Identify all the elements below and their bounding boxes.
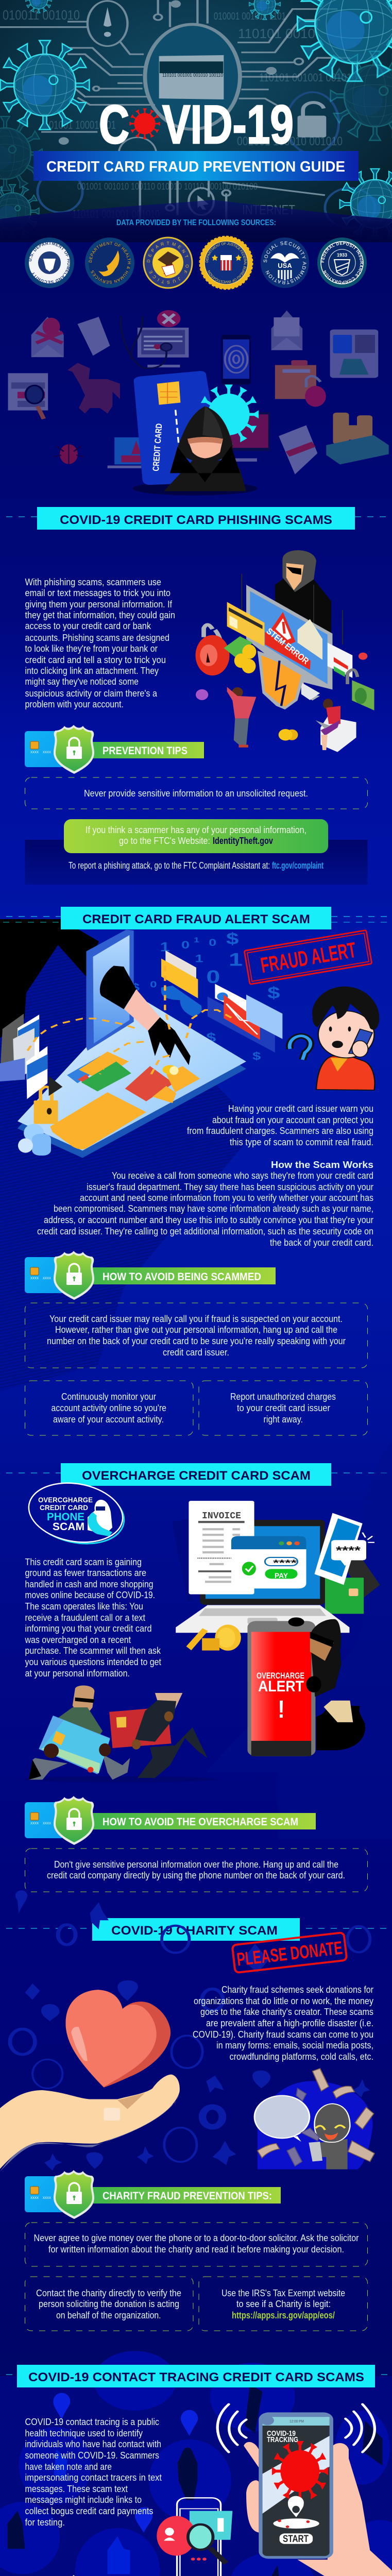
text block: fraud alert description: from fraudulent charges. Scammers are also using (187, 1126, 373, 1136)
text block: overcharge description: informing you that your credit card (25, 1623, 151, 1634)
heading: overcharge: OVERCHARGE CREDIT CARD SCAM (82, 1469, 311, 1483)
open hand (0, 2074, 180, 2169)
icon: cyan virus (199, 385, 259, 444)
circuit board illustration (0, 0, 375, 228)
text block: overcharge description: at your personal information. (25, 1668, 130, 1679)
phone screen labels: TRACKING (267, 2435, 298, 2444)
heading: phishing scams (6, 507, 387, 530)
icon: hooded caller (88, 1500, 112, 1534)
tip banner: charity prevention: XXXX (30, 2197, 39, 2200)
icon: green padlock (348, 670, 374, 710)
binary and money symbols: 0 (181, 939, 190, 951)
logo: overcharge phone scam badge: CREDIT CARD (40, 1503, 88, 1512)
laptop (176, 1520, 349, 1633)
laptop labels: **** (273, 1558, 297, 1568)
illustration: tracking phone in hand (157, 2404, 392, 2576)
icon: blue mask (161, 986, 202, 1016)
phone body (259, 2412, 333, 2559)
tip box: report charges: to your credit card issuer (237, 1403, 330, 1413)
text block: overcharge description: This credit card scam is gaining (25, 1557, 142, 1567)
alert phone (247, 1621, 315, 1756)
illustration: fraud alert scene (0, 919, 379, 1158)
dotted data trail (27, 966, 234, 1074)
text block: charity description: are prevalent after a high-profile disaster (i.e. (206, 2018, 373, 2028)
text block: overcharge description: was overcharged on a recent (25, 1635, 131, 1645)
icon: coin stacks (333, 413, 372, 444)
text block: charity description: COVID-19). Charity fraud scams can come to you (193, 2029, 373, 2040)
tip box: verify charity: person soliciting the donation is acting (39, 2299, 179, 2309)
tip box: door-to-door solicitors: Never agree to give money over the phone or to a door-to-door solicitor. Ask the solicitor (34, 2233, 359, 2243)
tip box: IRS tax exempt: https://apps.irs.gov/app/eos/ (232, 2310, 335, 2320)
tip box: door-to-door solicitors (25, 2223, 368, 2266)
text block: contact tracing description: someone with COVID-19. Scammers (25, 2450, 159, 2461)
silhouette people (8, 2384, 383, 2576)
phone screen labels (267, 2420, 309, 2545)
icon: login window (8, 373, 48, 419)
banknotes (258, 2069, 374, 2162)
icon: document (77, 317, 110, 355)
text block: contact tracing description: COVID-19 contact tracing is a public (25, 2417, 159, 2427)
icon: padlock (34, 1087, 58, 1124)
heading: fraud alert (3, 907, 392, 929)
binary text decoration (3, 7, 357, 221)
phishing icons collage (8, 310, 389, 474)
tip box: IRS tax exempt: Use the IRS's Tax Exempt website (221, 2288, 345, 2298)
phone and bubble (315, 1513, 374, 1585)
text block: phishing description: access to your credit card or bank (25, 621, 151, 631)
binary text decoration: 110101 001001 001010 (259, 71, 357, 84)
icon: scattered cards (50, 1052, 200, 1149)
tip banner: avoid overcharge: XXXX (30, 1822, 39, 1825)
logo: overcharge phone scam badge: PHONE (47, 1511, 84, 1523)
start button (280, 2533, 313, 2544)
heading: charity scam (6, 1918, 387, 1941)
text block: fraud alert description (37, 1104, 373, 1248)
heading: contact tracing: COVID-19 CONTACT TRACING CREDIT CARD SCAMS (28, 2370, 364, 2384)
hooded hacker (164, 406, 246, 491)
icon: folder and lock (275, 360, 326, 407)
icon: red envelope (215, 984, 260, 1040)
background: contact tracing crowd (0, 2351, 392, 2576)
seal: Department of Justice: DEPARTMENT OF JUSTICE (147, 242, 189, 284)
icon: cash bundle (326, 435, 389, 465)
tip box: IRS tax exempt (199, 2277, 368, 2331)
phone screen labels: COVID-19 (267, 2429, 296, 2438)
text block: phishing description: giving them your personal information. If (25, 599, 173, 609)
seal: FDIC: 1933 (337, 252, 347, 258)
tip banner: avoid overcharge (25, 1796, 316, 1845)
callout: identity theft: If you think a scammer has any of your personal information, (86, 825, 306, 835)
distressed man (227, 687, 256, 748)
tip box: unsolicited requests (25, 777, 368, 809)
icon: padlock red (196, 625, 230, 675)
fingers (244, 2442, 259, 2533)
illustration: burglars carrying cards (23, 1685, 217, 1782)
login window (328, 642, 352, 678)
icon: fingerprint phone (221, 335, 251, 384)
icon: laptop warning (108, 437, 142, 468)
green and black cards (325, 1556, 380, 1614)
speech bubble (254, 2095, 310, 2142)
tip box: monitor activity (25, 1381, 193, 1435)
text block: phishing description: accounts. Phishing scams are designed (25, 633, 169, 643)
subheading: how the scam works: How the Scam Works (271, 1160, 373, 1170)
hand shadow (0, 2094, 179, 2172)
illustration: laptop payment scene (173, 1501, 380, 1756)
panel: hero header (0, 0, 392, 242)
distressed woman on box (315, 699, 356, 752)
tip banner: avoid being scammed: HOW TO AVOID BEING SCAMMED (103, 1271, 261, 1283)
icon: trojan horse (67, 363, 120, 414)
icon: coronavirus particles (0, 0, 392, 239)
text block: overcharge description: you various questions intended to get (25, 1657, 161, 1667)
text block: contact tracing description: collect bogus credit card payments (25, 2506, 154, 2516)
tip box: issuer may call: However, rather than give out your personal information, hang up and call the (55, 1325, 337, 1335)
grinning figure (309, 2104, 350, 2170)
hero illustration: hacker and credit card (132, 371, 259, 495)
laptop labels: PAY (275, 1571, 288, 1580)
icon: question mark (289, 1036, 311, 1060)
seal: Social Security Administration: SOCIAL SECURITY ADMINISTRATION (264, 241, 306, 284)
icon: yellow folder (161, 951, 198, 998)
hacker silhouette (0, 919, 99, 1038)
text block: phishing description: problem with your account. (25, 699, 124, 709)
text block: charity description: Charity fraud schemes seek donations for (221, 1985, 373, 1995)
text block: phishing description: to look like they're from your bank or (25, 643, 158, 654)
text block: fraud alert description: this type of scam to commit real fraud. (230, 1137, 373, 1147)
binary and money symbols: $ (131, 981, 140, 994)
blue card (39, 1716, 110, 1774)
background hatch: fraud section (0, 922, 258, 1391)
small phone and analytics (157, 2498, 232, 2576)
phone platform (18, 995, 246, 1158)
card label: CREDIT CARD (151, 423, 164, 471)
tip box: verify charity (25, 2277, 193, 2331)
text block: overcharge description: handled in cash and more shopping (25, 1579, 154, 1589)
credit card (134, 371, 224, 485)
agency seals (25, 236, 367, 290)
binary text decoration: 001001 100010 001010 (237, 134, 343, 148)
icon: gold coin and bar (186, 1624, 241, 1651)
binary and money symbols: 1 (160, 940, 169, 954)
signal waves (217, 2404, 374, 2452)
logo: overcharge phone scam badge (24, 1476, 130, 1552)
binary text decoration: 010011 001010 (3, 7, 80, 23)
tip banner: prevention tips: PREVENTION TIPS (103, 745, 188, 757)
text block: phishing description: email or text messages to trick you into (25, 588, 171, 598)
illustration: scammer with money (254, 2069, 374, 2170)
invoice (189, 1501, 254, 1594)
text block: phishing description: into clicking link an attachment. They (25, 666, 159, 676)
icon: private document (279, 425, 317, 474)
text block: fraud alert description: Having your credit card issuer warn you (228, 1104, 373, 1114)
stamp: please donate (232, 1933, 347, 1973)
tip box: overcharge advice: Don't give sensitive personal information over the phone. Hang up and call the (54, 1859, 338, 1870)
text block: contact tracing description (25, 2417, 162, 2528)
text block: overcharge description: receive a fraudulent call or a text (25, 1613, 145, 1623)
ID card (227, 602, 264, 646)
alert phone label: OVERCHARGE (257, 1671, 304, 1681)
text block: charity description: organizations that do little or no work, the money (194, 1996, 373, 2006)
logo: overcharge phone scam badge: OVERCGHARGE (38, 1496, 93, 1504)
heading: fraud alert: CREDIT CARD FRAUD ALERT SCAM (82, 912, 310, 926)
binary and money symbols: 1 (194, 936, 199, 944)
tip box: monitor activity: aware of your account activity. (53, 1414, 164, 1425)
icon: rejected X (157, 310, 180, 327)
icon: wifi card (246, 995, 282, 1039)
text block: phishing description: they get that information, they could gain (25, 610, 175, 620)
seal: FBI (199, 236, 253, 290)
icon: black sack (316, 1701, 365, 1750)
stamp: please donate: PLEASE DONATE (236, 1937, 344, 1970)
burglar right (138, 1693, 208, 1778)
icon: location pins (53, 2393, 198, 2533)
binary text decoration: 010001 001011 1101 (214, 11, 286, 22)
tip banner: avoid being scammed: XXXX (43, 1277, 51, 1280)
tip banner: avoid being scammed (25, 1251, 276, 1300)
data sources label: DATA PROVIDED BY THE FOLLOWING SOURCES: (116, 218, 276, 227)
laptop labels: INVOICE (202, 1511, 241, 1521)
tip banner: avoid overcharge: XXXX (43, 1822, 51, 1825)
text block: fraud alert description: about fraud on your account can protect you (212, 1115, 373, 1125)
tip banner: prevention tips: XXXX (43, 751, 51, 754)
text block: contact tracing description: impersonating contact tracers in text (25, 2472, 162, 2483)
background hatch: overcharge section (206, 1443, 392, 1839)
text block: contact tracing description: individuals who have had contact with (25, 2439, 161, 2449)
text block: charity description: crowdfunding platforms, cold calls, etc. (230, 2052, 373, 2062)
illustration: heart over open hand (0, 1990, 180, 2172)
tip box: monitor activity: account activity online so you're (52, 1403, 166, 1413)
binary text decoration: 01001 100010 01 (49, 118, 116, 131)
binary and money symbols: 0 (150, 980, 157, 990)
text block: charity description: goes to the fake charity's creator. These scams (200, 2007, 373, 2017)
icon: gold coins (279, 729, 298, 740)
background shapes: charity decoration (10, 1890, 370, 2171)
binary and money symbols (131, 930, 280, 1062)
tip box: issuer may call: number on the back of your credit card to be sure you're really speaking with your (47, 1336, 346, 1346)
tip box: report charges: Report unauthorized charges (230, 1392, 336, 1402)
text block: contact tracing description: messages might include links to (25, 2495, 142, 2505)
tip box: issuer may call: Your credit card issuer may really call you if fraud is suspected on your account. (49, 1314, 343, 1324)
text block: overcharge description: The scam operates like this: You (25, 1601, 143, 1612)
seal: Homeland Security: U.S. DEPARTMENT OF HOMELAND SECURITY (28, 242, 71, 284)
stamp: fraud alert (244, 930, 372, 985)
text block: overcharge description (25, 1557, 161, 1679)
tip banner: avoid overcharge: HOW TO AVOID THE OVERCHARGE SCAM (103, 1816, 298, 1828)
icon: coins and cash (224, 636, 256, 673)
subtitle banner (33, 151, 359, 181)
binary and money symbols: $ (267, 984, 280, 1002)
binary text decoration: 110101 001001 001010 (72, 208, 160, 221)
text block: phishing description (25, 577, 175, 709)
logo: overcharge phone scam badge: SCAM (53, 1521, 84, 1533)
binary text decoration: 001001 001010 100110 010010 10110 100100 010100 (77, 181, 258, 192)
text block: overcharge description: purchase. The scammer will then ask (25, 1646, 161, 1656)
alert phone label: ! (278, 1696, 285, 1723)
icon: open envelope (271, 311, 302, 350)
icon: coin stack (18, 1124, 51, 1156)
text block: charity description (193, 1985, 373, 2062)
text block: overcharge description: moves online because of COVID-19. (25, 1590, 155, 1600)
panel: report attack (25, 840, 368, 885)
laptop labels (202, 1511, 361, 1580)
text block: overcharge description: ground as fewer transactions are (25, 1568, 146, 1578)
heading: phishing scams: COVID-19 CREDIT CARD PHISHING SCAMS (60, 513, 332, 527)
seal: Social Security Administration: USA (278, 262, 292, 269)
icon: bug with code (54, 444, 84, 464)
tip banner: contact tracing prevention (25, 2575, 200, 2576)
text block: fraud alert description: the back of your credit card. (270, 1238, 373, 1248)
phone screen labels: START (283, 2534, 309, 2545)
tip box: monitor activity: Continuously monitor your (61, 1392, 156, 1402)
tip banner: avoid being scammed: XXXX (30, 1277, 39, 1280)
callout: identity theft: IdentityTheft.gov (213, 836, 273, 846)
tip banner: charity prevention: CHARITY FRAUD PREVENTION TIPS: (103, 2190, 272, 2202)
tip box: issuer may call: credit card issuer. (163, 1347, 229, 1358)
monitor (246, 585, 332, 701)
alert phone label: ALERT (258, 1678, 304, 1695)
binary and money symbols: 0 (209, 937, 216, 948)
icon: broken shield (258, 651, 305, 709)
subtitle banner: CREDIT CARD FRAUD PREVENTION GUIDE (46, 159, 345, 175)
alert phone label (257, 1671, 304, 1723)
purple banknotes (287, 2088, 319, 2166)
social profile screens (0, 1013, 62, 1099)
tip box: overcharge advice (25, 1849, 368, 1892)
tip banner: charity prevention: XXXX (43, 2197, 51, 2200)
callout: identity theft: go to the FTC's Website: (119, 836, 210, 846)
arm (298, 2443, 392, 2576)
red card (109, 1700, 176, 1750)
icon: bugs (196, 653, 367, 700)
phone screen labels: 12:00 PM (289, 2420, 304, 2424)
tip box: overcharge advice: credit card company directly by using the phone number on the back of your card. (47, 1870, 345, 1880)
tip box: unsolicited requests: Never provide sensitive information to an unsolicited request. (84, 788, 308, 799)
binary and money symbols: $ (226, 930, 238, 948)
burglar peeking (288, 1617, 341, 1697)
phone with reaching hand (86, 929, 191, 1065)
navy wave (0, 200, 392, 242)
heading: charity scam: COVID-19 CHARITY SCAM (111, 1924, 278, 1938)
text block: phishing description: might say they've noticed some (25, 676, 139, 687)
icon: monitor with bug (121, 316, 189, 368)
tip box: door-to-door solicitors: for written information about the charity and read it before making your decision. (48, 2244, 344, 2255)
tip banner: prevention tips (25, 725, 204, 774)
binary text decoration: 110101 001001 001010 100110 (162, 73, 223, 78)
icon: skull envelope (31, 317, 64, 357)
tip box: verify charity: Contact the charity directly to verify the (36, 2288, 181, 2298)
laptop labels: **** (336, 1544, 361, 1557)
tip box: issuer may call (25, 1303, 368, 1368)
binary and money symbols: $ (206, 1030, 216, 1045)
binary and money symbols: 1 (195, 953, 203, 964)
text block: contact tracing description: have taken note and are (25, 2462, 112, 2472)
text block: phishing description: With phishing scams, scammers use (25, 577, 161, 587)
text block: contact tracing description: messages. These scam text (25, 2484, 128, 2494)
icon: red virus in title (129, 108, 160, 139)
tip box: report charges (199, 1381, 368, 1435)
worried woman on phone (289, 987, 379, 1090)
heading: contact tracing (6, 2365, 387, 2387)
binary and money symbols: 0 (206, 967, 220, 987)
gloved hands (44, 1743, 111, 1758)
seal: FBI: DEPARTMENT OF JUSTICE FEDERAL BUREAU OF INVESTIGATION (206, 242, 247, 283)
tip banner: charity prevention (25, 2170, 281, 2219)
illustration: system error scene (196, 550, 374, 752)
icon: heart (66, 1990, 171, 2088)
text block: contact tracing description: health technique used to identify (25, 2428, 143, 2438)
icon: map pin (273, 2496, 319, 2529)
tip box: verify charity: on behalf of the organization. (56, 2310, 161, 2320)
icon: red virus (272, 2441, 328, 2501)
tip box: report charges: right away. (264, 1414, 303, 1425)
binary and money symbols: 1 (229, 950, 243, 970)
tip box: IRS tax exempt: to see if a Charity is legit: (236, 2299, 331, 2309)
error label: STEM ERROR (264, 626, 311, 666)
title: COVID-19 (99, 94, 294, 155)
icon: ATM (330, 329, 378, 378)
icon: monitor (220, 412, 270, 462)
binary text decoration: 110101 0010 (238, 26, 315, 41)
panel: report attack: ftc.gov/complaint (272, 860, 323, 871)
text block: phishing description: credit card and tell a story to trick you (25, 655, 166, 665)
binary and money symbols: $ (252, 1050, 261, 1062)
text block: phishing description: suspicious activity or claim there's a (25, 688, 158, 699)
seal: Health and Human Services: DEPARTMENT OF HEALTH & HUMAN SERVICES (89, 242, 131, 284)
tip banner: prevention tips: XXXX (30, 751, 39, 754)
binary text decoration: INTERNET (242, 202, 295, 217)
callout: identity theft (64, 819, 328, 853)
hooded scammer (275, 550, 331, 642)
text block: contact tracing description: for testing. (25, 2517, 65, 2528)
error band (265, 632, 311, 670)
payment window (231, 1536, 306, 1588)
text block: charity description: in many forms: emails, social media posts, (216, 2040, 373, 2050)
warning triangle (271, 612, 296, 646)
icon: hooked envelope (242, 574, 343, 660)
panel: report attack: To report a phishing attack, go to the FTC Complaint Assistant at: (69, 860, 270, 871)
burglar left (29, 1685, 130, 1780)
heading: overcharge (6, 1463, 387, 1486)
seal: FDIC: FEDERAL DEPOSIT INSURANCE CORPORATION (321, 242, 363, 283)
